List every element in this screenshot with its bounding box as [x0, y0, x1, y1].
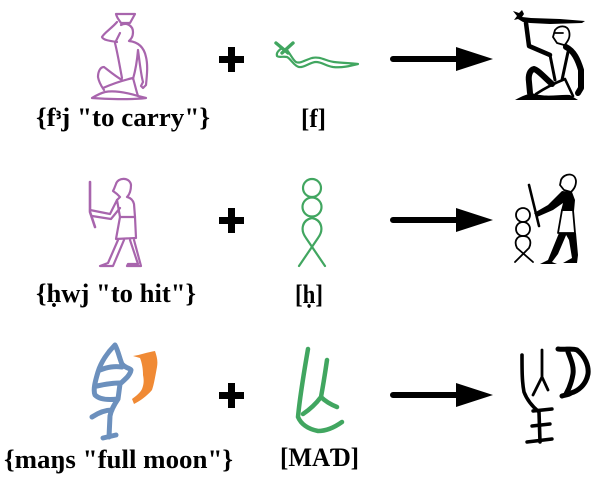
arrow	[390, 47, 493, 71]
icon: green twisted wick	[299, 179, 325, 266]
row 2: to hit	[36, 174, 578, 309]
label: maŋs full moon: {maŋs "full moon"}	[4, 445, 233, 474]
icon: green horned viper	[276, 43, 358, 67]
arrow	[390, 208, 493, 232]
icon: purple seated man carrying basket	[92, 14, 147, 99]
icon: plus sign	[219, 47, 244, 72]
label: fꜣj to carry: ꜣ	[56, 107, 62, 123]
label: MAƊ: [MAƊ]	[280, 443, 359, 472]
icon: black seated man carrying stick	[513, 10, 585, 100]
arrow	[390, 383, 493, 407]
icon: plus sign	[219, 208, 244, 233]
row 1: to carry	[36, 10, 585, 133]
icon: green oracle glyph	[298, 349, 342, 431]
icon: purple man with stick	[90, 179, 141, 266]
icon: black oracle glyph	[522, 349, 588, 442]
label: ḥwj to hit: {ḥwj "to hit"}	[36, 279, 196, 308]
label: ḥ: [ḥ]	[295, 280, 323, 309]
label: fꜣj to carry: {f	[36, 103, 55, 132]
label: f: [f]	[301, 104, 326, 133]
icon: plus sign	[219, 383, 244, 408]
icon: black wick and man with stick	[515, 174, 578, 264]
label: fꜣj to carry: j "to carry"}	[60, 103, 210, 132]
icon: blue and orange oracle glyph	[92, 345, 157, 438]
row 3: full moon	[4, 345, 588, 474]
